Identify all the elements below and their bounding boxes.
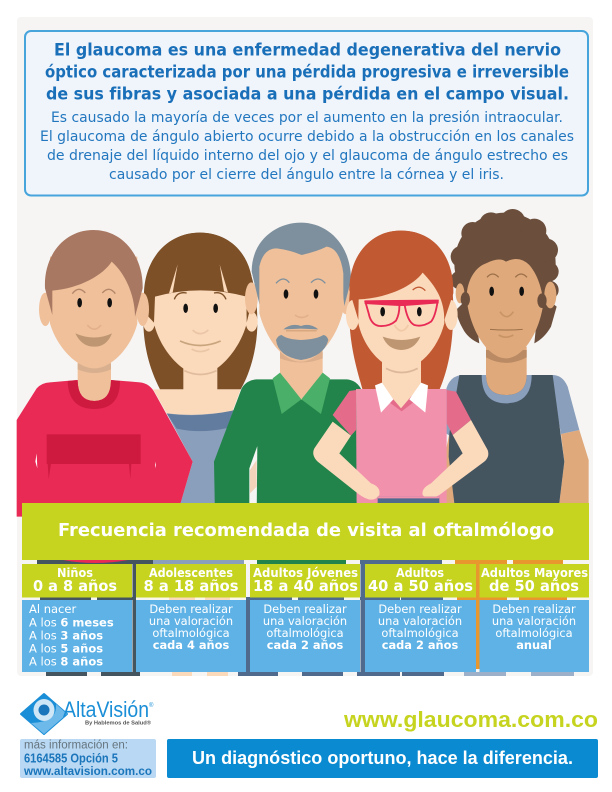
- header: adolescentes: 8 a 18 años: [144, 577, 239, 595]
- logo: Alta Visión: AltaVisión: [63, 697, 149, 722]
- header: niños: 0 a 8 años: [33, 577, 117, 595]
- schedule: niños: A los 5 años: [29, 642, 103, 656]
- schedule: niños: A los 8 años: [29, 654, 103, 668]
- column: adolescentes: [136, 564, 246, 672]
- advice: adultos mayores: una valoración: [492, 614, 576, 628]
- contact box: [20, 739, 156, 778]
- advice: adultos mayores: anual: [516, 638, 552, 652]
- intro body text: Es causado la mayoría de veces por el aumento en la presión intraocular.: [51, 110, 563, 126]
- column: adultos jóvenes: [250, 564, 360, 672]
- advice: adultos: oftalmológica: [381, 626, 459, 640]
- intro heading: de sus fibras y asociada a una pérdida en el campo visual.: [46, 84, 569, 104]
- header: niños: [33, 566, 117, 595]
- intro body text: El glaucoma de ángulo abierto ocurre debido a la obstrucción en los canales: [40, 129, 574, 145]
- contact box: 6164585 Opción 5: [24, 752, 118, 766]
- banner: recommended visit frequency: [22, 503, 589, 560]
- legs and torsos seen through gaps between the boxes: [37, 560, 574, 676]
- advice: adultos jóvenes: [263, 602, 347, 652]
- header: adultos jóvenes: [253, 566, 358, 595]
- column: niños: [22, 564, 132, 672]
- contact box: más información en:: [24, 740, 128, 752]
- advice: adultos: cada 2 años: [382, 638, 458, 652]
- intro body text: de drenaje del líquido interno del ojo y el glaucoma de ángulo estrecho es: [47, 148, 568, 164]
- advice: adolescentes: Deben realizar: [149, 602, 233, 616]
- icon: eye in diamond: [21, 694, 67, 734]
- header: niños: Niños: [57, 566, 93, 580]
- header: adultos: Adultos: [396, 566, 444, 580]
- schedule: niños: A los 3 años: [29, 628, 103, 642]
- advice: adultos jóvenes: oftalmológica: [266, 626, 344, 640]
- header: adultos jóvenes: Adultos Jóvenes: [253, 566, 358, 580]
- advice: adultos: [378, 602, 462, 652]
- person: man with curly hair and dark vest: [433, 209, 589, 517]
- advice: adultos jóvenes: cada 2 años: [267, 638, 343, 652]
- header: adultos: 40 a 50 años: [368, 577, 473, 595]
- advice: adultos mayores: [492, 602, 576, 652]
- illustration: group of five people: [17, 230, 258, 517]
- logo: Alta Visión: By Hablemos de Salud®: [85, 720, 151, 726]
- logo: Alta Visión: [21, 694, 154, 734]
- header: adultos jóvenes: 18 a 40 años: [253, 577, 358, 595]
- schedule: niños: Al nacer: [29, 602, 76, 616]
- intro heading: óptico caracterizada por una pérdida progresiva e irreversible: [45, 62, 569, 82]
- advice: adultos: Deben realizar: [378, 602, 462, 616]
- icon: red glasses: [365, 300, 439, 326]
- column: adultos mayores: [480, 564, 589, 672]
- header: adultos mayores: [481, 566, 588, 595]
- slogan bar: Un diagnóstico oportuno, hace la diferencia.: [192, 748, 573, 768]
- person: teen girl with brown hair: [143, 233, 258, 517]
- advice: adultos: una valoración: [378, 614, 462, 628]
- column: adultos: [365, 564, 476, 672]
- banner: recommended visit frequency: Frecuencia recomendada de visita al oftalmólogo: [58, 520, 554, 541]
- advice: adolescentes: una valoración: [149, 614, 233, 628]
- intro heading: El glaucoma es una enfermedad degenerativa del nervio: [54, 40, 561, 60]
- advice: adultos mayores: oftalmológica: [495, 626, 573, 640]
- person: older man with grey hair and green sweater: [214, 223, 366, 517]
- advice: adolescentes: [149, 602, 233, 652]
- header: adultos mayores: Adultos Mayores: [481, 566, 588, 580]
- advice: adolescentes: oftalmológica: [152, 626, 230, 640]
- header: adolescentes: [144, 566, 239, 595]
- person: woman with red hair, glasses and pink top: [313, 231, 488, 517]
- header: adultos: [368, 566, 473, 595]
- advice: adultos jóvenes: una valoración: [263, 614, 347, 628]
- person: boy in red sweater: [17, 230, 193, 517]
- intro panel: [25, 31, 588, 196]
- header: adolescentes: Adolescentes: [149, 566, 233, 580]
- intro heading: [45, 40, 569, 104]
- contact box: www.altavision.com.co: [23, 764, 152, 778]
- intro body text: [40, 110, 574, 183]
- schedule: niños: [29, 602, 114, 668]
- website link: www.glaucoma.com.co: [343, 707, 598, 732]
- intro body text: causado por el cierre del ángulo entre la córnea y el iris.: [109, 167, 504, 183]
- advice: adolescentes: cada 4 años: [153, 638, 229, 652]
- advice: adultos mayores: Deben realizar: [492, 602, 576, 616]
- slogan bar: [167, 739, 598, 778]
- advice: adultos jóvenes: Deben realizar: [263, 602, 347, 616]
- header: adultos mayores: de 50 años: [489, 577, 579, 595]
- logo: Alta Visión: ®: [149, 702, 154, 709]
- schedule: niños: A los 6 meses: [29, 616, 114, 630]
